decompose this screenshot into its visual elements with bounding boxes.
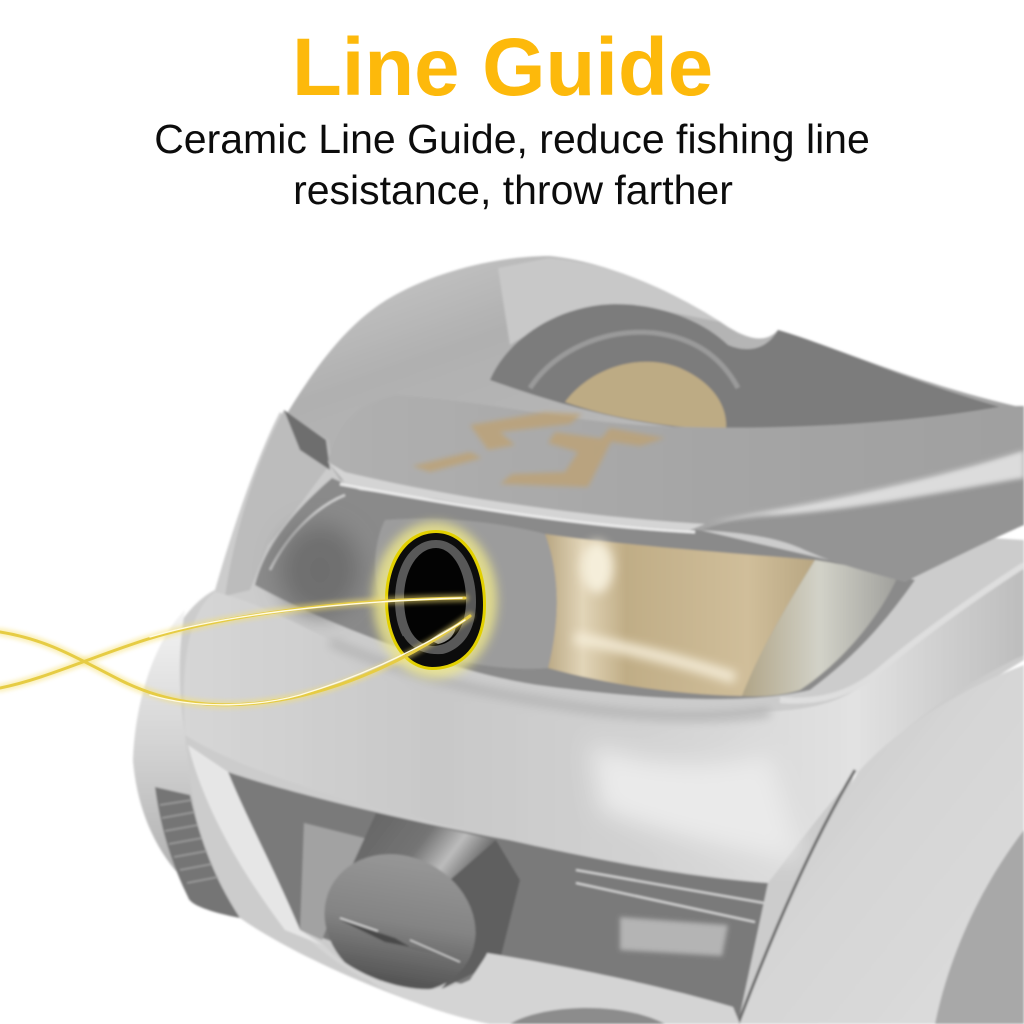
reel: brow over window [328, 395, 1024, 530]
reel: brow lit edge [328, 462, 705, 530]
reel: left side body [133, 412, 1024, 1024]
subtitle [154, 116, 870, 213]
reel: lever shaft [350, 813, 496, 890]
subtitle: resistance, throw farther [293, 167, 733, 213]
reel: lower cavity [228, 772, 768, 1024]
reel: lower right inner parts [620, 917, 728, 956]
reel: left cheek [225, 410, 332, 596]
reel: top ridge panel [498, 258, 720, 345]
reel: brow underside [700, 448, 1024, 582]
reel: right side cover [738, 665, 1024, 1024]
line guide glow [373, 522, 497, 678]
fishing reel [133, 256, 1024, 1024]
subtitle: Ceramic Line Guide, reduce fishing line [154, 116, 870, 162]
reel: white strip beside cavity [188, 745, 322, 945]
reel: gold spool cylinder [545, 534, 815, 696]
reel: spool silver end [742, 560, 897, 696]
reel: spool highlights [581, 541, 613, 593]
reel: knurled dial [155, 787, 240, 918]
reel: lever knob [300, 828, 500, 1018]
reel: right edge dark panel [935, 830, 1024, 1024]
reel: front band [184, 565, 1024, 883]
fishing line [0, 598, 470, 705]
line guide ring [385, 530, 486, 670]
reel: window behind line guide [255, 478, 915, 699]
reel: spool gold top [565, 362, 726, 430]
reel: S logo [412, 412, 665, 487]
reel: top cover [280, 256, 1024, 470]
reel: lower rim [300, 930, 740, 1024]
reel: left rim [133, 610, 215, 905]
title: Line Guide [292, 22, 713, 113]
reel: guide housing [375, 519, 557, 669]
reel: spool opening [490, 304, 1004, 430]
